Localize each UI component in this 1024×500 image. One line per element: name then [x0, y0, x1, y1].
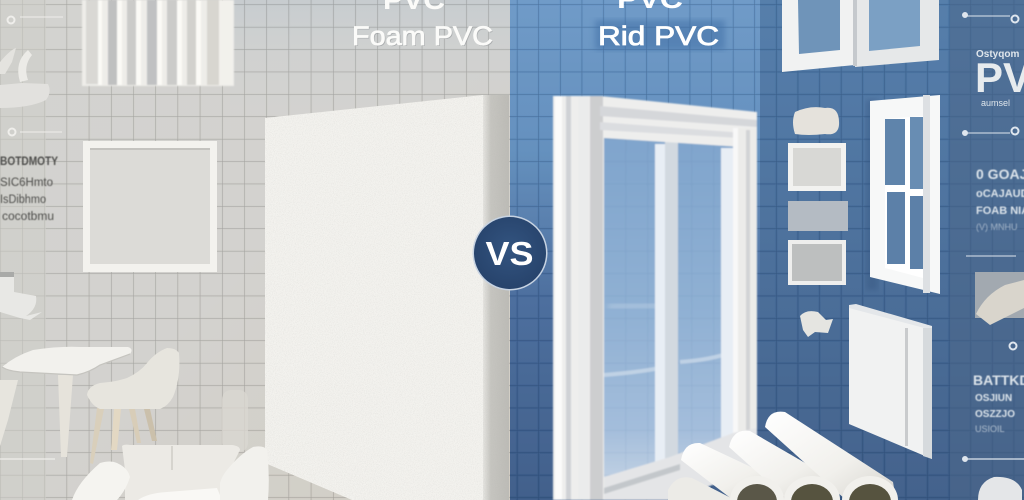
icon: right bottom sample: [978, 477, 1022, 500]
icon: VS badge: VS: [486, 235, 534, 272]
heading: rigid PVC: [595, 0, 725, 51]
icon: sculpture sample: [0, 48, 50, 108]
text block: left garbled description: cocotbmu: [2, 211, 54, 223]
text block: right lower description: OSZZJO: [975, 409, 1015, 420]
icon: right pipe bundle sample: [975, 272, 1024, 325]
heading: foam PVC: Foam PVC: [353, 22, 494, 52]
icon: crumpled sample: [800, 311, 833, 337]
panel: foam PVC board: [265, 95, 509, 500]
text block: right lower description: USIOIL: [975, 424, 1005, 434]
panel: rigid PVC tile background: [510, 0, 1024, 500]
panel: window frame: [553, 96, 757, 500]
panel: top double window: [782, 0, 939, 72]
text block: left garbled description: SIC6Hmto: [0, 177, 53, 189]
furniture: table: [2, 347, 132, 457]
panel: square foam frame: [83, 141, 217, 272]
swatches: sample column: [788, 107, 848, 285]
callout lines: left side: [0, 16, 63, 459]
text block: right garbled description: (V) MNHU: [976, 222, 1018, 232]
text block: left garbled description: IsDibhmo: [0, 194, 46, 206]
icon: VS badge: [472, 216, 548, 290]
text block: right garbled description: [976, 166, 1024, 232]
text block: left garbled description: BOTDMOTY: [0, 156, 58, 168]
text block: right lower description: [973, 372, 1024, 434]
panel: curtain wall sample: [82, 0, 234, 86]
pipes: rolled PVC: [668, 412, 898, 500]
text block: right lower description: OSJIUN: [975, 393, 1012, 404]
text block: right PVC label: aumsel: [981, 98, 1010, 108]
icon: left tool sample: [0, 272, 42, 446]
furniture: armchair: [72, 390, 269, 500]
text block: right PVC label: Ostyqom: [976, 49, 1019, 60]
heading: rigid PVC: Rid PVC: [598, 21, 719, 51]
heading: foam PVC: [352, 0, 494, 52]
panel: foam PVC tile background: [0, 0, 510, 500]
panel: small white window: [866, 95, 940, 294]
callout lines: right side: [962, 12, 1024, 462]
text block: left garbled description: [0, 156, 58, 223]
heading: foam PVC: Foam PVC: [352, 21, 493, 51]
panel: white wall panel: [849, 304, 932, 459]
furniture: chair: [87, 348, 179, 464]
